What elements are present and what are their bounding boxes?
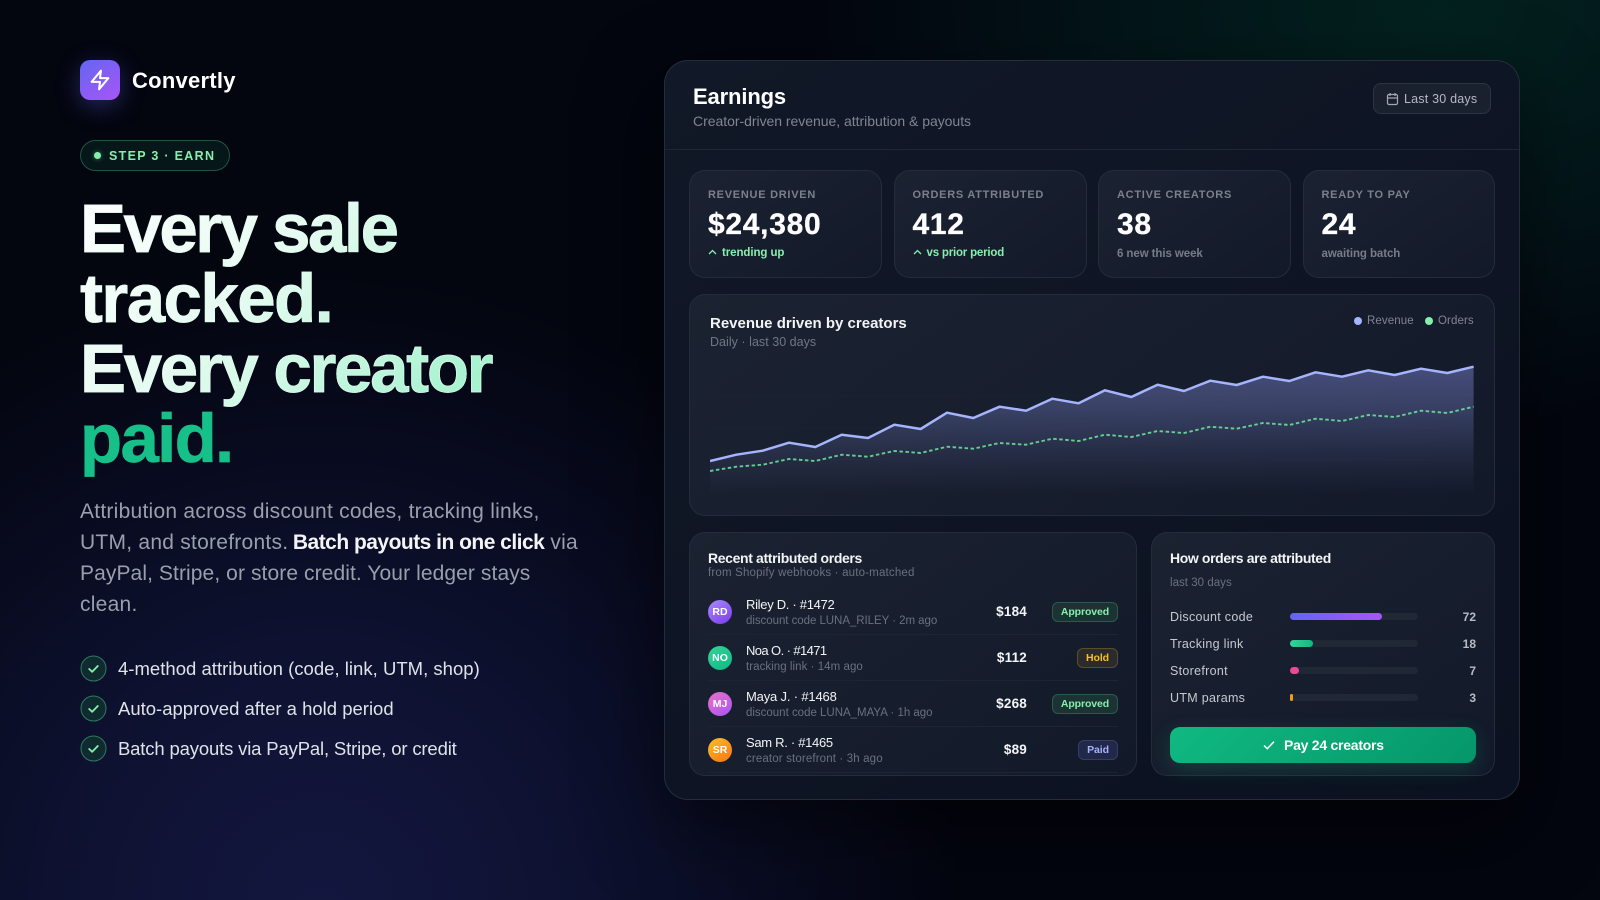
- order: Maya: [708, 689, 1118, 727]
- KPI: revenue driven: trending up: [722, 247, 784, 259]
- status: paid: [1078, 740, 1118, 760]
- date range button: [1373, 83, 1491, 114]
- description: Attribution across discount codes, tracking links,: [80, 500, 540, 523]
- panel title: Recent attributed orders: [708, 550, 862, 566]
- bar: storefront: 7: [1469, 664, 1476, 678]
- KPI: orders attributed: 412: [912, 208, 965, 241]
- KPI: orders attributed: [894, 170, 1087, 278]
- headline: Every creator: [80, 330, 491, 407]
- avatar SR: [708, 738, 732, 762]
- brand name: Convertly: [132, 68, 236, 93]
- chart subtitle: Daily · last 30 days: [710, 335, 816, 349]
- feature list: [80, 656, 480, 762]
- bar: discount code: 72: [1463, 610, 1476, 624]
- avatar RD: [708, 600, 732, 624]
- description: clean.: [80, 593, 138, 616]
- panel: recent orders: [689, 532, 1137, 776]
- KPI: active creators: 38: [1117, 208, 1152, 241]
- order: Riley: $184: [996, 604, 1027, 619]
- chart legend: Orders: [1438, 315, 1474, 327]
- panel: attribution breakdown: [1151, 532, 1495, 776]
- KPI: ready to pay: awaiting batch: [1322, 248, 1400, 260]
- status: hold: Hold: [1086, 652, 1109, 664]
- feature: auto approval: Auto-approved after a hold period: [118, 698, 394, 719]
- chart title: Revenue driven by creators: [710, 315, 907, 332]
- KPI: revenue driven: [689, 170, 882, 278]
- avatar MJ: MJ: [713, 698, 727, 710]
- revenue line: [710, 367, 1474, 461]
- pay button: [1170, 727, 1476, 763]
- order: Sam: [708, 735, 1118, 773]
- status: approved: Approved: [1061, 698, 1109, 710]
- revenue area: [710, 367, 1474, 494]
- avatar SR: SR: [713, 744, 727, 756]
- KPI: active creators: ACTIVE CREATORS: [1117, 189, 1232, 201]
- dashboard subtitle: Creator-driven revenue, attribution & payouts: [693, 113, 971, 129]
- feature: attribution: 4-method attribution (code, link, UTM, shop): [118, 658, 480, 679]
- line chart: [710, 366, 1474, 480]
- bar: UTM params: UTM params: [1170, 691, 1245, 705]
- panel subtitle: last 30 days: [1170, 577, 1232, 589]
- order: Maya: $268: [996, 696, 1027, 711]
- order: Sam: $89: [1004, 742, 1027, 757]
- step badge: STEP 3 · EARN: [109, 149, 215, 163]
- panel subtitle: from Shopify webhooks · auto-matched: [708, 567, 915, 579]
- avatar RD: RD: [712, 606, 728, 618]
- KPI: ready to pay: [1303, 170, 1495, 278]
- bar: tracking link: Tracking link: [1170, 637, 1244, 651]
- icon: lightning bolt: [80, 60, 120, 100]
- order: Noa: [708, 643, 1118, 681]
- bar: discount code: Discount code: [1170, 610, 1253, 624]
- KPI: active creators: 6 new this week: [1117, 248, 1203, 260]
- headline: paid.: [80, 400, 233, 477]
- KPI: revenue driven: REVENUE DRIVEN: [708, 189, 816, 201]
- order: Maya: Maya J. · #1468: [746, 689, 837, 704]
- KPI: orders attributed: vs prior period: [926, 247, 1004, 259]
- status: approved: [1052, 602, 1118, 622]
- headline: [80, 202, 493, 477]
- order: Maya: discount code LUNA_MAYA · 1h ago: [746, 707, 933, 719]
- KPI: orders attributed: ORDERS ATTRIBUTED: [912, 189, 1044, 201]
- KPI: ready to pay: READY TO PAY: [1322, 189, 1411, 201]
- bar: storefront: Storefront: [1170, 664, 1228, 678]
- order: Sam: Sam R. · #1465: [746, 735, 833, 750]
- brand logo: [67, 53, 236, 119]
- chart legend: Revenue: [1367, 315, 1414, 327]
- order: Noa: $112: [997, 650, 1027, 665]
- avatar NO: NO: [712, 652, 728, 664]
- order: Riley: discount code LUNA_RILEY · 2m ago: [746, 615, 937, 627]
- status: approved: Approved: [1061, 606, 1109, 618]
- order: Riley: [708, 597, 1118, 635]
- bar: discount code: [1170, 610, 1476, 624]
- avatar MJ: [708, 692, 732, 716]
- order: Noa: Noa O. · #1471: [746, 643, 826, 658]
- orders line: [710, 407, 1474, 471]
- bar: tracking link: [1170, 637, 1476, 651]
- pay button: Pay 24 creators: [1284, 737, 1384, 753]
- step badge: [80, 140, 230, 171]
- description: [80, 500, 578, 616]
- order: Riley: Riley D. · #1472: [746, 597, 834, 612]
- status: approved: [1052, 694, 1118, 714]
- bar: storefront: [1170, 664, 1476, 678]
- status: hold: [1077, 648, 1118, 668]
- KPI: active creators: [1098, 170, 1291, 278]
- bar: UTM params: 3: [1469, 691, 1476, 705]
- panel title: How orders are attributed: [1170, 550, 1331, 566]
- panel: earnings dashboard: [664, 60, 1520, 800]
- date range button: Last 30 days: [1404, 92, 1477, 106]
- KPI: revenue driven: $24,380: [708, 208, 821, 241]
- KPI: ready to pay: 24: [1322, 208, 1356, 241]
- chart legend: [1354, 315, 1474, 327]
- description: PayPal, Stripe, or store credit. Your ledger stays: [80, 562, 530, 585]
- avatar NO: [708, 646, 732, 670]
- bar: UTM params: [1170, 691, 1476, 705]
- description: UTM, and storefronts. Batch payouts in one click via: [80, 531, 578, 554]
- dashboard title: Earnings: [693, 84, 786, 109]
- feature: batch payouts: Batch payouts via PayPal, Stripe, or credit: [118, 738, 457, 759]
- order: Noa: tracking link · 14m ago: [746, 661, 863, 673]
- order: Sam: creator storefront · 3h ago: [746, 753, 883, 765]
- panel: revenue chart: [689, 294, 1495, 516]
- status: paid: Paid: [1087, 744, 1109, 756]
- bar: tracking link: 18: [1463, 637, 1476, 651]
